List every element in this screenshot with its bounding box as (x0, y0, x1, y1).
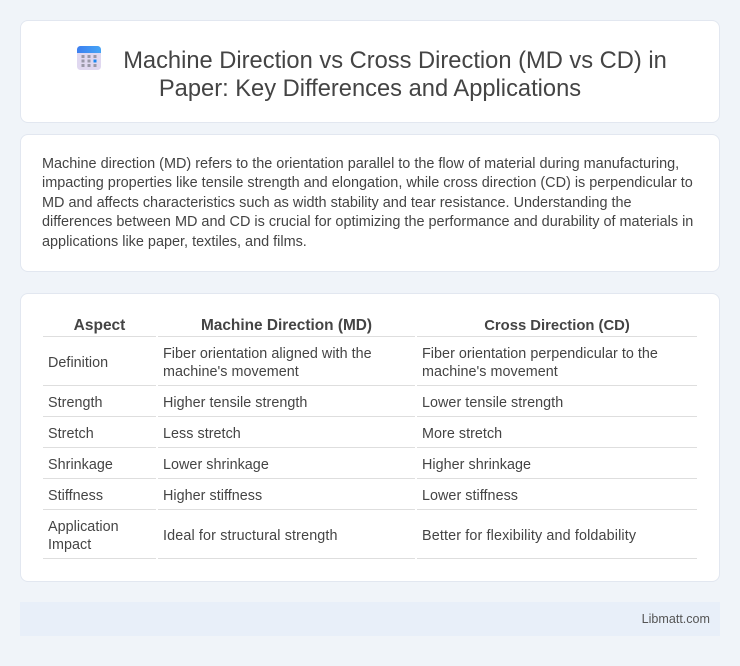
cell: MD strength: Higher tensile strength (163, 395, 307, 411)
table header: Aspect: Aspect (74, 317, 125, 334)
text block: intro paragraph: impacting properties like tensile strength and elongation, while cross direction (CD) is perpendicular to (42, 175, 693, 191)
cell: CD stiffness: Lower stiffness (422, 488, 518, 504)
row label: Application Impact: Impact (48, 537, 91, 553)
text block: intro paragraph: Machine direction (MD) refers to the orientation parallel to the flow of material during manufacturing, (42, 156, 679, 172)
cell: MD definition: Fiber orientation aligned with the (163, 346, 372, 362)
text block: intro paragraph: applications like paper, textiles, and films. (42, 234, 307, 250)
panel: comparison table card (20, 293, 720, 582)
cell: MD stretch: Less stretch (163, 426, 241, 442)
row label: Stiffness: Stiffness (48, 488, 103, 504)
footer bar (20, 602, 720, 636)
row label: Strength: Strength (48, 395, 103, 411)
text block: intro paragraph: MD and affects characteristics such as width stability and tear resistance. Understanding the (42, 194, 632, 210)
panel: header card (20, 20, 720, 123)
row label: Application Impact (48, 519, 119, 553)
cell: CD definition: Fiber orientation perpendicular to the (422, 346, 658, 362)
table header: Cross Direction: Cross Direction (CD) (484, 318, 630, 334)
text block: intro paragraph: differences between MD and CD is crucial for optimizing the performance and durability of materials in (42, 214, 693, 230)
panel: intro card (20, 134, 720, 272)
text block: intro paragraph (42, 156, 693, 250)
cell: CD strength: Lower tensile strength (422, 395, 563, 411)
table header: Machine Direction: Machine Direction (MD) (201, 317, 372, 334)
row label: Definition: Definition (48, 355, 108, 371)
cell: MD shrinkage: Lower shrinkage (163, 457, 269, 473)
cell: MD definition: machine's movement (163, 364, 299, 380)
row label: Shrinkage: Shrinkage (48, 457, 113, 473)
cell: CD shrinkage: Higher shrinkage (422, 457, 531, 473)
title (123, 48, 667, 102)
icon: calendar (77, 46, 101, 70)
title: Paper: Key Differences and Applications (159, 76, 581, 102)
cell: CD definition: machine's movement (422, 364, 558, 380)
cell: CD stretch: More stretch (422, 426, 502, 442)
cell: CD application impact: Better for flexibility and foldability (422, 528, 636, 544)
row label: Application Impact: Application (48, 519, 119, 535)
footer text: Libmatt.com (642, 612, 710, 626)
cell: MD application impact: Ideal for structural strength (163, 528, 338, 544)
cell: CD definition (422, 346, 658, 380)
cell: MD stiffness: Higher stiffness (163, 488, 262, 504)
row label: Stretch: Stretch (48, 426, 94, 442)
cell: MD definition (163, 346, 372, 380)
title: Machine Direction vs Cross Direction (MD vs CD) in (123, 48, 667, 74)
